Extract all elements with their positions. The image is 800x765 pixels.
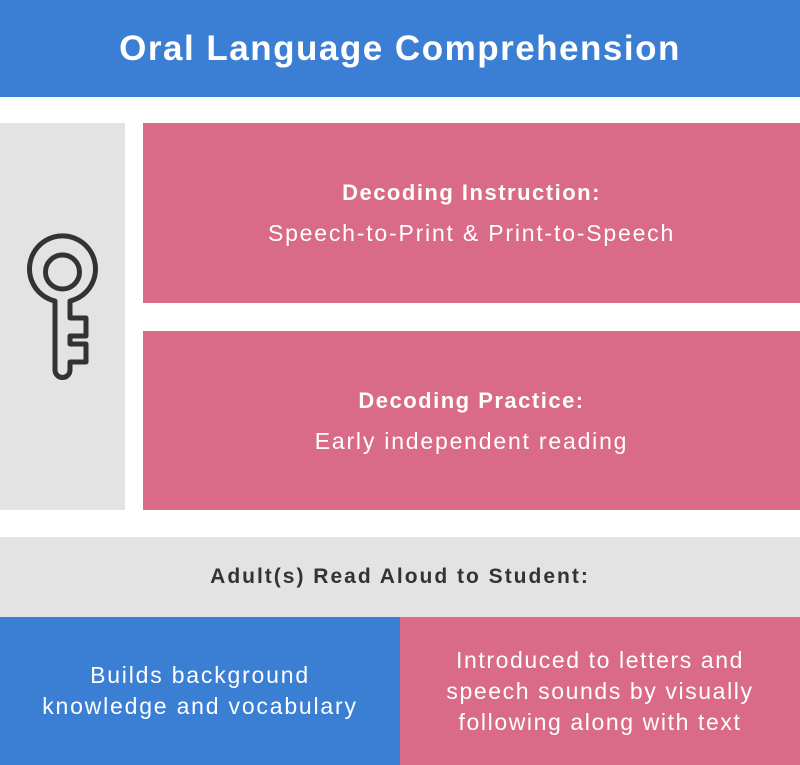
panel: letters and sounds: speech sounds by visually — [446, 678, 754, 704]
panel: decoding instruction — [143, 123, 800, 303]
title — [0, 0, 800, 97]
panel: letters and sounds — [400, 617, 800, 765]
title: Oral Language Comprehension — [119, 28, 681, 68]
panel: decoding practice — [143, 331, 800, 510]
heading: read aloud: Adult(s) Read Aloud to Student: — [210, 565, 590, 588]
panel: background knowledge: Builds background — [90, 662, 310, 688]
panel: letters and sounds: Introduced to letters and — [456, 646, 744, 672]
panel: decoding instruction: Decoding Instruction: — [342, 180, 601, 205]
icon: key — [27, 233, 98, 380]
panel: decoding instruction: Speech-to-Print & Print-to-Speech — [268, 220, 675, 246]
panel: letters and sounds: following along with text — [459, 708, 741, 734]
panel: decoding practice: Early independent reading — [315, 428, 628, 454]
panel: background knowledge — [0, 617, 400, 765]
panel: key side — [0, 123, 125, 510]
heading: read aloud — [0, 537, 800, 617]
panel: decoding practice: Decoding Practice: — [358, 388, 585, 412]
panel: background knowledge: knowledge and vocabulary — [42, 693, 358, 719]
